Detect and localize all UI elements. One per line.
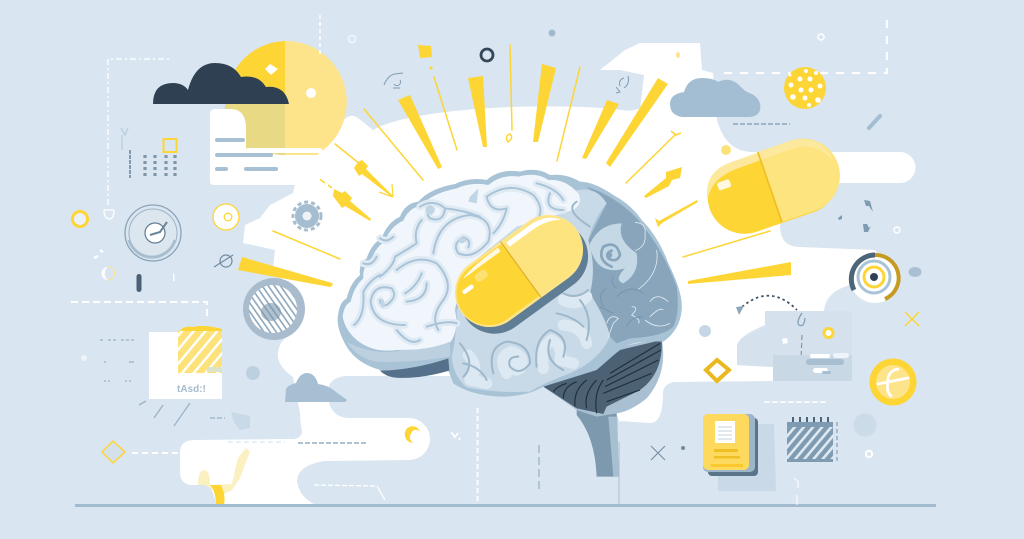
blue cloud — [670, 78, 760, 117]
lower rim — [347, 342, 450, 362]
dashes under blue cloud — [733, 123, 790, 125]
capsule right — [697, 129, 850, 244]
ray wedges — [238, 64, 791, 287]
white cloud backdrop — [180, 43, 915, 505]
icon: diamond ring — [706, 360, 729, 381]
sun disc — [225, 41, 347, 155]
data blocks right — [773, 328, 852, 381]
icon: shield — [104, 210, 114, 219]
dashed line top — [319, 15, 321, 55]
ray lines — [273, 45, 770, 259]
icon: yellow ring — [72, 212, 88, 226]
icon: leaf sketch — [214, 255, 233, 267]
dashed vertical lines — [478, 408, 619, 505]
grey dash marks — [81, 340, 225, 426]
dashed frame top left — [108, 59, 172, 205]
cerebellum — [543, 338, 663, 417]
x and dot — [651, 446, 685, 460]
temporal shadow — [380, 358, 449, 378]
scattered marks right — [838, 200, 900, 233]
icon: hatched calendar — [787, 417, 837, 462]
icon: sketch squiggles — [384, 73, 628, 93]
icon: diamond left — [102, 441, 125, 463]
icon: yellow x — [905, 312, 919, 326]
dashes over white panel — [228, 442, 385, 500]
note card: tAsd:! — [177, 384, 206, 395]
capsule shadow — [446, 208, 602, 347]
faint blot — [231, 412, 250, 430]
icon: hatched sphere — [243, 278, 305, 340]
small grey cloud — [285, 373, 347, 402]
blue bands over backdrop — [297, 70, 852, 505]
small check mark — [451, 432, 460, 440]
icon: flame — [198, 448, 250, 507]
frontal sulci — [354, 183, 563, 342]
icon: yellow crescent — [405, 426, 420, 443]
baseline — [75, 504, 936, 507]
icon: coin — [870, 358, 916, 406]
brain outline — [338, 170, 682, 397]
rear lobe — [587, 187, 678, 343]
circles lower right — [794, 414, 876, 505]
small oval — [908, 267, 922, 277]
frontal shading — [380, 188, 478, 308]
note card — [149, 326, 222, 399]
white dashes right — [764, 401, 827, 403]
icon: gear — [293, 202, 321, 230]
rays burst — [238, 45, 791, 287]
brain — [338, 170, 682, 477]
icon: slash — [869, 116, 880, 128]
arrow rays — [318, 131, 698, 227]
icon: disc — [213, 204, 239, 230]
document panel — [210, 109, 322, 185]
dark cloud — [153, 63, 289, 104]
middle lobe — [452, 189, 610, 392]
rear lobe spiral — [590, 222, 670, 337]
dashed connector left — [71, 302, 207, 320]
icon: target rings — [850, 253, 900, 303]
dashed connector lower left — [132, 452, 178, 454]
brainstem — [577, 408, 619, 477]
dashed frame top right — [724, 20, 887, 73]
small rings and dots top — [348, 30, 824, 155]
icon: book — [703, 414, 776, 491]
icon: dotted ball — [784, 67, 826, 109]
middle gyri — [460, 202, 590, 383]
icon: bar dots chart — [121, 128, 176, 178]
blue dot — [246, 366, 260, 380]
icon: gauge — [125, 205, 181, 261]
dotted arc arrow — [736, 296, 805, 361]
capsule in brain — [441, 201, 602, 347]
capsule body — [441, 201, 597, 341]
frontal lobe — [343, 175, 580, 351]
small marks left — [94, 250, 174, 292]
blue dot right — [699, 325, 711, 337]
